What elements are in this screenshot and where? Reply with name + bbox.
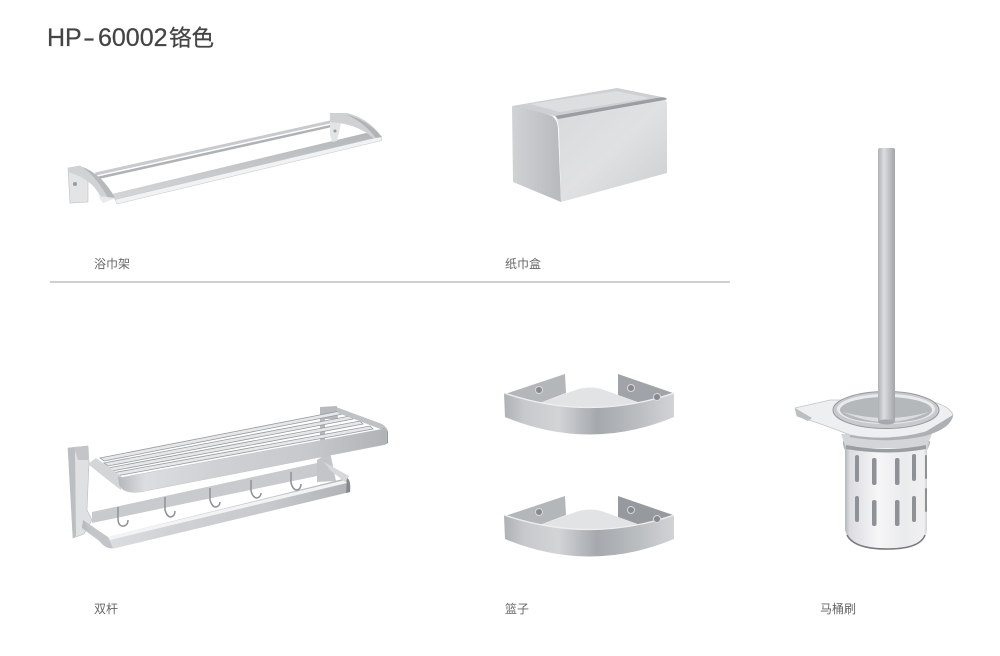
title: HP <box>47 24 82 52</box>
product: towel rack <box>68 113 382 204</box>
product: double bar shelf <box>68 406 388 548</box>
product: toilet brush <box>795 148 953 550</box>
product: lower corner basket <box>504 496 674 556</box>
label: 马桶刷: 马桶刷 <box>820 601 856 616</box>
product: upper corner basket <box>504 374 674 434</box>
divider line <box>50 282 730 283</box>
title: - <box>83 24 95 52</box>
title: 60002 <box>98 24 168 52</box>
label: 篮子: 篮子 <box>505 601 529 616</box>
label: 纸巾盒: 纸巾盒 <box>505 256 541 271</box>
title: 铬色 <box>169 26 214 51</box>
label: 浴巾架: 浴巾架 <box>94 257 130 271</box>
product: tissue box <box>512 88 667 202</box>
label: 双杆: 双杆 <box>94 602 118 616</box>
